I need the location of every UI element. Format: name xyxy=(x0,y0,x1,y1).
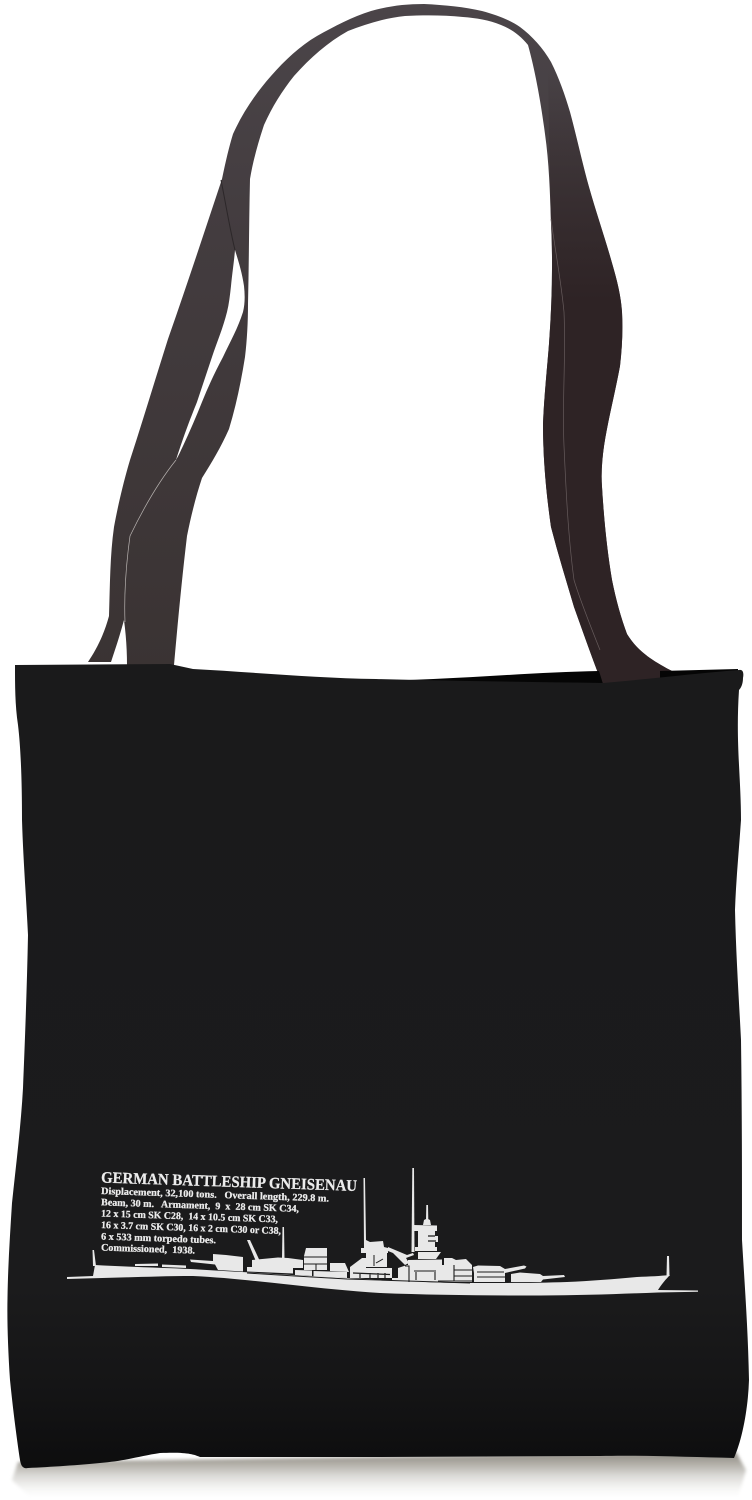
bridge platform xyxy=(408,1260,442,1265)
floor shadow xyxy=(12,1452,746,1497)
aft fire control tower xyxy=(304,1248,327,1270)
bow flagstaff xyxy=(666,1256,670,1276)
spec line 4: 16 x 3.7 cm SK C30, 16 x 2 cm C30 or C38, xyxy=(101,1220,282,1237)
hull xyxy=(67,1265,698,1296)
hull deck shadow line xyxy=(247,1273,470,1283)
amidships deck block xyxy=(330,1263,349,1272)
main mast xyxy=(412,1168,414,1252)
forward turret Anton xyxy=(511,1272,565,1282)
printed design: Gneisenau specifications and ship profile xyxy=(67,1168,698,1296)
right strap shading xyxy=(543,70,680,686)
aft turret Caesar xyxy=(190,1254,243,1272)
spec line 5: 6 x 533 mm torpedo tubes. xyxy=(101,1232,217,1246)
title: GERMAN BATTLESHIP GNEISENAU xyxy=(101,1170,358,1195)
stern flagstaff xyxy=(92,1250,96,1266)
funnel base with aft mast xyxy=(361,1178,388,1267)
specification text block xyxy=(101,1170,358,1257)
bag handles xyxy=(88,4,680,686)
forward turret Bruno xyxy=(473,1266,526,1282)
spec line 1: Displacement, 32,100 tons. Overall length, 229.8 m. xyxy=(101,1186,330,1205)
funnel strut xyxy=(388,1247,414,1265)
left strap stitching xyxy=(125,460,176,622)
handle strap loop xyxy=(88,4,680,686)
aft superstructure xyxy=(247,1258,303,1274)
forward superstructure xyxy=(392,1258,472,1282)
forward control tower xyxy=(413,1225,438,1251)
aft mast xyxy=(282,1227,284,1258)
bridge xyxy=(418,1252,441,1259)
bag inner back edge xyxy=(409,671,603,684)
aft deck blocks xyxy=(295,1270,347,1278)
forward tower mast xyxy=(426,1205,428,1220)
right strap stitching xyxy=(551,219,600,650)
anti-aircraft gun xyxy=(247,1240,264,1271)
stern deck fittings xyxy=(135,1264,186,1268)
spec line 2: Beam, 30 m. Armament, 9 x 28 cm SK C34, xyxy=(101,1197,300,1215)
bag inner back edge right of strap xyxy=(660,669,738,678)
spec line 6: Commissioned, 1938. xyxy=(101,1243,196,1257)
left strap fold xyxy=(221,180,235,250)
battleship silhouette xyxy=(67,1168,698,1296)
midship gun cluster xyxy=(350,1258,392,1278)
bag body xyxy=(7,664,749,1468)
tower cap xyxy=(423,1218,431,1225)
spec line 3: 12 x 15 cm SK C28, 14 x 10.5 cm SK C33, xyxy=(101,1209,279,1225)
